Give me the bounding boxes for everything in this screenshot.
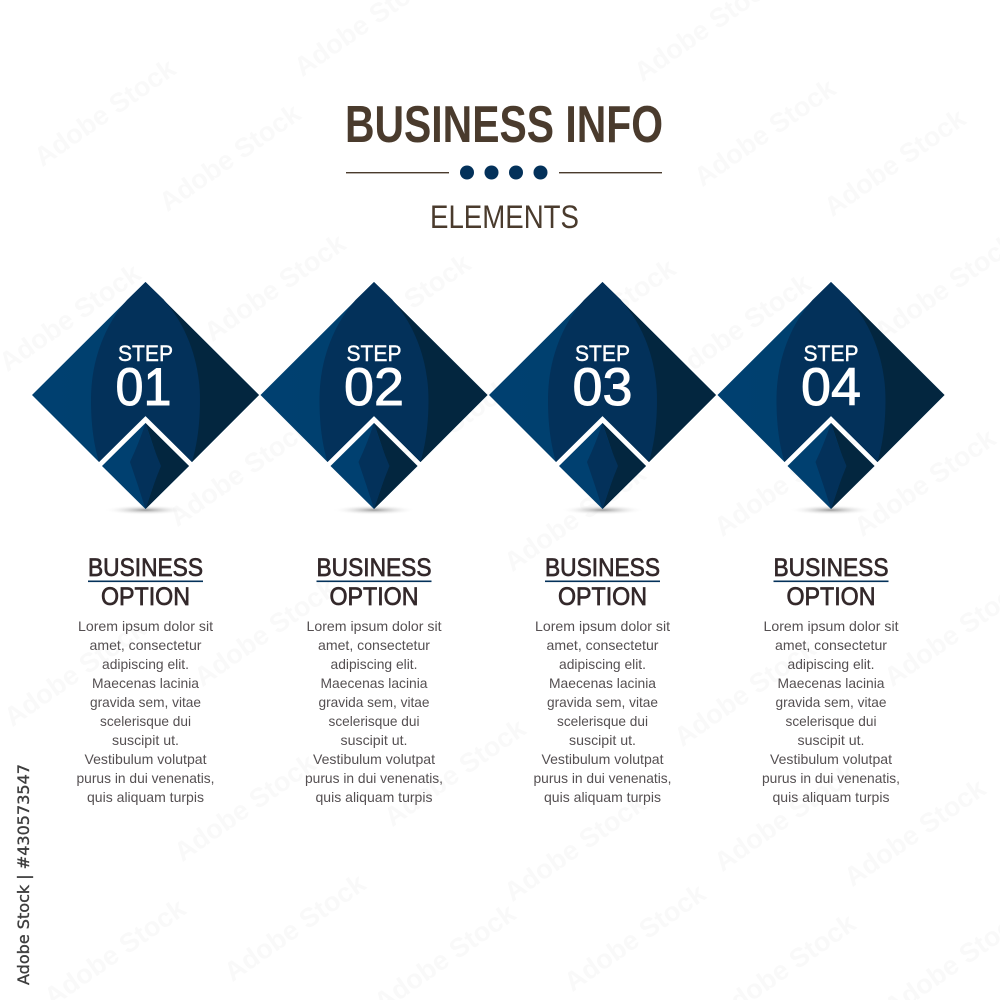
body text: Maecenas lacinia	[92, 675, 199, 691]
heading	[774, 554, 888, 611]
small diamond	[102, 423, 189, 509]
step number: 03	[572, 358, 632, 417]
title: BUSINESS INFO	[345, 96, 663, 154]
body text	[305, 618, 443, 805]
small diamond	[788, 423, 874, 509]
small diamond	[559, 423, 646, 509]
body text: quis aliquam turpis	[544, 789, 661, 805]
step number: 04	[801, 358, 861, 417]
body text: Lorem ipsum dolor sit	[306, 618, 442, 634]
body text: Maecenas lacinia	[320, 675, 428, 691]
body text: gravida sem, vitae	[547, 694, 658, 710]
watermark pattern: Adobe Stock	[849, 422, 1000, 542]
heading	[88, 554, 203, 611]
watermark pattern: Adobe Stock	[29, 52, 182, 172]
heading: OPTION	[558, 583, 647, 611]
body text: purus in dui venenatis,	[762, 770, 900, 786]
text block: option 2	[305, 554, 443, 805]
body text: Vestibulum volutpat	[313, 751, 435, 767]
body text: gravida sem, vitae	[90, 694, 201, 710]
panel: step 3 diamond	[489, 282, 716, 515]
watermark pattern: Adobe Stock	[839, 772, 992, 892]
body text: scelerisque dui	[557, 713, 648, 729]
heading: BUSINESS	[316, 554, 432, 582]
watermark pattern: Adobe Stock	[559, 877, 712, 997]
watermark pattern: Adobe Stock	[669, 632, 822, 752]
step label: STEP	[575, 341, 630, 366]
watermark pattern: Adobe Stock	[499, 457, 652, 577]
main diamond	[32, 282, 259, 462]
watermark pattern: Adobe Stock	[219, 867, 372, 987]
body text: gravida sem, vitae	[776, 694, 887, 710]
body text: quis aliquam turpis	[316, 789, 432, 805]
subtitle: ELEMENTS	[430, 199, 579, 235]
body text: suscipit ut.	[569, 732, 636, 748]
body text: amet, consectetur	[90, 637, 202, 653]
text block: option 3	[534, 554, 672, 805]
step number: 01	[116, 358, 172, 417]
body text	[534, 618, 672, 805]
step label: STEP	[804, 341, 858, 366]
body text	[76, 618, 214, 805]
body text: amet, consectetur	[775, 637, 887, 653]
watermark pattern: Adobe Stock	[0, 612, 152, 732]
step label: STEP	[346, 341, 402, 366]
step number: 02	[344, 358, 404, 417]
body text: scelerisque dui	[100, 713, 191, 729]
heading: BUSINESS	[88, 554, 203, 582]
watermark pattern: Adobe Stock	[199, 227, 352, 347]
watermark pattern: Adobe Stock	[154, 97, 307, 217]
panel: step 1 diamond	[32, 282, 259, 515]
watermark pattern: Adobe Stock	[169, 747, 322, 867]
panel: step 4 diamond	[718, 282, 944, 515]
body text: scelerisque dui	[786, 713, 876, 729]
watermark pattern: Adobe Stock	[819, 102, 972, 222]
heading: BUSINESS	[774, 554, 888, 582]
body text: suscipit ut.	[798, 732, 864, 748]
main diamond	[489, 282, 716, 462]
watermark pattern: Adobe Stock	[709, 757, 862, 877]
watermark pattern: Adobe Stock	[499, 787, 652, 907]
body text: adipiscing elit.	[788, 656, 874, 672]
stock credit: Adobe Stock | #430573547	[14, 764, 33, 985]
body text: amet, consectetur	[546, 637, 659, 653]
body text: purus in dui venenatis,	[534, 770, 672, 786]
body text	[762, 618, 900, 805]
watermark pattern: Adobe Stock	[664, 267, 817, 387]
body text: Maecenas lacinia	[549, 675, 656, 691]
text block: option 4	[762, 554, 900, 805]
body text: suscipit ut.	[112, 732, 179, 748]
small diamond	[330, 423, 418, 509]
body text: Vestibulum volutpat	[84, 751, 207, 767]
body text: scelerisque dui	[328, 713, 420, 729]
body text: adipiscing elit.	[330, 656, 418, 672]
watermark pattern: Adobe Stock	[689, 72, 842, 192]
body text: adipiscing elit.	[102, 656, 189, 672]
body text: Maecenas lacinia	[778, 675, 885, 691]
watermark pattern: Adobe Stock	[324, 247, 477, 367]
panel: step 2 diamond	[260, 282, 488, 515]
watermark pattern: Adobe Stock	[529, 252, 682, 372]
body text: Lorem ipsum dolor sit	[78, 618, 213, 634]
text block: option 1	[76, 554, 214, 805]
heading: OPTION	[786, 583, 876, 611]
watermark pattern: Adobe Stock	[364, 372, 517, 492]
body text: Vestibulum volutpat	[542, 751, 664, 767]
body text: amet, consectetur	[318, 637, 430, 653]
heading: BUSINESS	[545, 554, 660, 582]
step label: STEP	[118, 341, 173, 366]
heading	[545, 554, 660, 611]
body text: Lorem ipsum dolor sit	[764, 618, 899, 634]
body text: quis aliquam turpis	[772, 789, 890, 805]
body text: quis aliquam turpis	[87, 789, 204, 805]
body text: adipiscing elit.	[559, 656, 646, 672]
watermark pattern: Adobe Stock	[189, 572, 342, 692]
heading: OPTION	[101, 583, 190, 611]
heading	[316, 554, 432, 611]
body text: purus in dui venenatis,	[305, 770, 443, 786]
main diamond	[260, 282, 488, 462]
watermark pattern: Adobe Stock	[379, 712, 532, 832]
body text: Lorem ipsum dolor sit	[535, 618, 670, 634]
body text: suscipit ut.	[340, 732, 408, 748]
body text: purus in dui venenatis,	[76, 770, 214, 786]
heading: OPTION	[330, 583, 418, 611]
title divider with dots	[346, 166, 662, 180]
body text: Vestibulum volutpat	[770, 751, 892, 767]
watermark pattern: Adobe Stock	[709, 422, 862, 542]
body text: gravida sem, vitae	[318, 694, 430, 710]
main diamond	[718, 282, 944, 462]
watermark pattern: Adobe Stock	[164, 412, 317, 532]
